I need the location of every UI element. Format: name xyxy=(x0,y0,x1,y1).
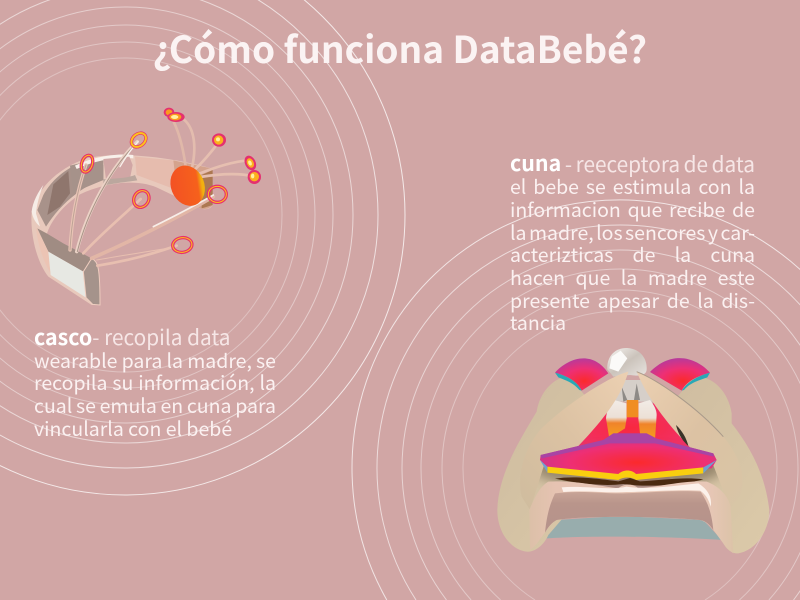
helmet wires xyxy=(70,115,253,266)
text block: casco: en xyxy=(160,390,183,419)
text block: casco: para xyxy=(235,390,276,419)
text block: cuna: dis- xyxy=(721,285,755,314)
cradle silver figure xyxy=(606,348,657,440)
text block: cuna: de xyxy=(684,148,708,178)
cradle magenta platform xyxy=(540,433,717,475)
text block: cuna: este xyxy=(718,262,755,291)
text block: casco: recopila xyxy=(34,367,107,396)
text block: casco: información, xyxy=(138,367,255,396)
cradle underside xyxy=(540,516,722,540)
text block: cuna: cuna xyxy=(510,147,561,178)
text block: cuna: madre xyxy=(648,262,707,291)
text block: casco: cual xyxy=(34,390,72,419)
text block: casco: emula xyxy=(100,390,157,419)
text block: cuna: - xyxy=(565,148,572,178)
text block: cuna: de xyxy=(632,239,655,268)
text block: cuna: car- xyxy=(720,217,755,246)
text block: cuna: la xyxy=(510,217,527,246)
text block: cuna: recibe xyxy=(669,194,725,223)
helmet front panel xyxy=(48,252,100,305)
text block: casco: wearable xyxy=(34,345,117,374)
helmet sensor tips xyxy=(164,108,261,184)
text block: cuna: de xyxy=(667,285,690,314)
text block: cuna: los xyxy=(596,217,623,246)
text block: casco: madre, xyxy=(187,345,252,374)
text block: cuna: apesar xyxy=(598,285,659,314)
text block: casco: se xyxy=(256,345,276,374)
cradle central red back xyxy=(565,403,698,448)
cradle platform shadow xyxy=(533,448,723,489)
helmet band xyxy=(31,154,213,305)
text block: casco: vincularla con el bebé xyxy=(34,413,232,442)
text block: cuna: bebe xyxy=(533,171,579,200)
text block: cuna: y xyxy=(708,217,718,246)
text block: casco xyxy=(34,321,276,442)
text block: cuna: acterizticas xyxy=(510,239,613,268)
cradle peach front xyxy=(529,481,733,553)
text block: cuna: que xyxy=(628,194,662,223)
cradle back pink lobes xyxy=(555,358,710,391)
text block: cuna: la xyxy=(738,171,755,200)
text block: cuna: data xyxy=(712,148,755,178)
text block: casco: la xyxy=(259,367,276,396)
helmet rings xyxy=(79,130,226,254)
text block: cuna: presente xyxy=(510,285,590,314)
text block: casco: cuna xyxy=(187,390,232,419)
cradle front flaps xyxy=(520,372,743,510)
text block: cuna: la xyxy=(675,239,691,268)
text block: cuna xyxy=(510,147,755,336)
text block: cuna: estimula xyxy=(613,171,691,200)
text block: cuna: informacion xyxy=(510,194,621,223)
text block: cuna: reeceptora xyxy=(576,148,680,178)
text block: casco: se xyxy=(76,390,96,419)
text block: cuna: sencores xyxy=(625,217,705,246)
text block: casco: para xyxy=(122,345,162,374)
text block: cuna: madre, xyxy=(529,217,594,246)
helmet central disc xyxy=(164,160,211,211)
text block: cuna: con xyxy=(698,171,732,200)
text block: cuna: el xyxy=(510,171,526,200)
text block: cuna: tancia xyxy=(510,307,566,336)
text block: casco: la xyxy=(167,345,183,374)
cradle yellow edge xyxy=(540,460,717,486)
text block: cuna: la xyxy=(697,285,714,314)
text block: cuna: de xyxy=(732,194,755,223)
text block: cuna: cuna xyxy=(710,239,755,268)
cradle beige body xyxy=(497,377,769,553)
text block: cuna: la xyxy=(621,262,637,291)
text block: cuna: se xyxy=(586,171,606,200)
text block: casco: su xyxy=(112,367,133,396)
text block: casco: casco- recopila data xyxy=(34,321,230,352)
title: ¿Cómo funciona DataBebé? xyxy=(153,20,647,74)
text block: cuna: hacen xyxy=(510,262,565,291)
text block: cuna: que xyxy=(576,262,610,291)
